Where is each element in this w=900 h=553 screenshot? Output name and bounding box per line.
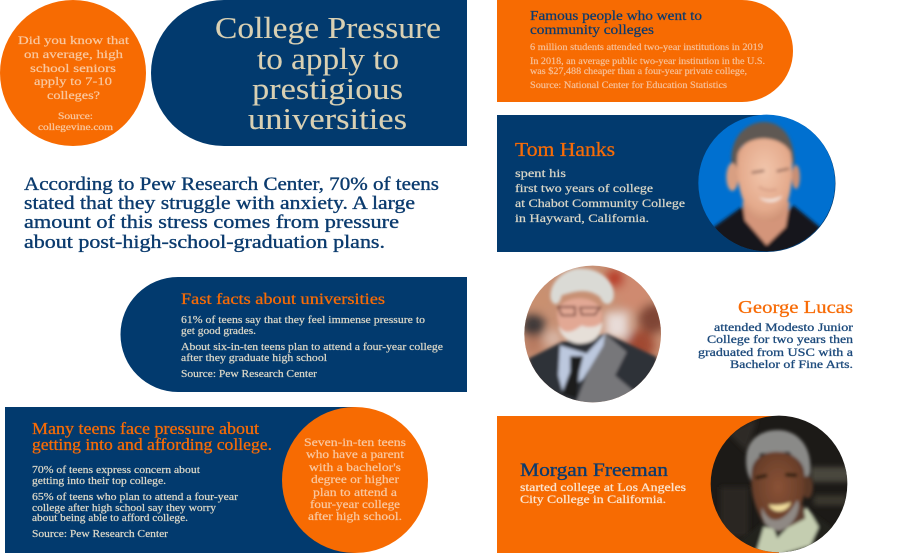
heading: famous people	[530, 8, 702, 37]
panel: Morgan Freeman	[497, 412, 854, 553]
text: fast facts body: 61% of teens say that they feel immense pressure to	[181, 315, 425, 326]
text: did you know fact: school seniors	[30, 61, 116, 75]
text: George Lucas bio	[698, 320, 854, 371]
title: College Pressure	[215, 10, 441, 45]
text: community college statistics	[530, 43, 765, 91]
text block: anxiety statistic: about post-high-school-graduation plans.	[24, 233, 385, 253]
image: Morgan Freeman portrait	[707, 412, 854, 553]
callout: seven in ten circle: with a bachelor's	[309, 460, 401, 474]
panel: Tom Hanks	[497, 112, 838, 255]
heading: many teens: Many teens face pressure about	[32, 419, 259, 438]
heading: many teens: getting into and affording college.	[32, 435, 272, 454]
text: fast facts body: after they graduate high school	[181, 353, 327, 364]
callout: seven in ten circle: four-year college	[310, 497, 400, 511]
heading: George Lucas: George Lucas	[738, 297, 853, 317]
text: many teens body	[32, 465, 239, 540]
text: Tom Hanks bio: in Hayward, California.	[515, 211, 649, 225]
text: did you know fact: collegevine.com	[38, 122, 113, 132]
panel: fast facts	[120, 277, 467, 392]
text: did you know fact	[18, 33, 130, 132]
text: many teens body: getting into their top college.	[32, 476, 166, 487]
panel: famous people	[497, 0, 793, 102]
text: Tom Hanks bio: spent his	[515, 166, 566, 180]
heading: famous people: Famous people who went to	[530, 8, 702, 23]
text: fast facts body: About six-in-ten teens plan to attend a four-year college	[181, 342, 443, 353]
text: Tom Hanks bio	[515, 166, 685, 225]
image: Tom Hanks portrait	[695, 112, 838, 255]
text: George Lucas bio: graduated from USC with a	[698, 345, 854, 359]
text: many teens body: 65% of teens who plan to attend a four-year	[32, 492, 239, 503]
title: prestigious	[252, 71, 403, 106]
heading: fast facts: Fast facts about universities	[181, 291, 385, 308]
text: many teens body: Source: Pew Research Center	[32, 529, 169, 540]
text: community college statistics: was $27,488 cheaper than a four-year private college,	[530, 66, 747, 77]
text: community college statistics: In 2018, an average public two-year institution in the U.S.	[530, 57, 765, 67]
panel: George Lucas	[520, 262, 854, 409]
text: many teens body: 70% of teens express concern about	[32, 465, 200, 476]
callout: seven in ten circle	[282, 407, 428, 553]
text: Tom Hanks bio: first two years of college	[515, 181, 653, 195]
text: did you know fact: on average, high	[24, 47, 123, 61]
callout: seven in ten circle: plan to attend a	[313, 485, 398, 499]
heading: Morgan Freeman: Morgan Freeman	[520, 461, 668, 481]
title: universities	[248, 101, 407, 136]
text block: anxiety statistic: amount of this stress comes from pressure	[24, 213, 399, 233]
text: did you know fact: apply to 7-10	[34, 74, 112, 88]
text: fast facts body	[181, 315, 443, 380]
text: community college statistics: Source: National Center for Education Statistics	[530, 80, 727, 91]
image: George Lucas portrait	[524, 266, 661, 402]
text: Tom Hanks bio: at Chabot Community College	[515, 196, 685, 210]
text: Morgan Freeman bio	[520, 480, 686, 506]
heading: Tom Hanks: Tom Hanks	[515, 140, 615, 161]
text: Morgan Freeman bio: started college at Los Angeles	[520, 480, 686, 494]
text: many teens body: about being able to afford college.	[32, 513, 188, 524]
title: to apply to	[257, 41, 399, 76]
text: many teens body: college after high school say they worry	[32, 503, 217, 514]
panel: many teens face pressure	[5, 407, 428, 553]
text: George Lucas bio: College for two years then	[707, 332, 853, 346]
text: did you know fact: Source:	[58, 111, 93, 121]
callout: seven in ten circle: after high school.	[308, 509, 402, 523]
text: George Lucas bio: Bachelor of Fine Arts.	[730, 357, 853, 371]
callout: seven in ten circle: degree or higher	[311, 472, 399, 486]
text: community college statistics: 6 million students attended two-year institutions in 2019	[530, 43, 763, 53]
text: fast facts body: get good grades.	[181, 326, 256, 337]
title	[215, 10, 441, 136]
panel: did you know circle	[0, 0, 146, 146]
heading: famous people: community colleges	[530, 22, 654, 37]
text block: anxiety statistic: stated that they struggle with anxiety. A large	[24, 194, 415, 214]
text: fast facts body: Source: Pew Research Center	[181, 369, 318, 380]
text block: anxiety statistic	[24, 175, 439, 253]
text: did you know fact: colleges?	[47, 88, 100, 102]
callout: seven in ten circle: who have a parent	[306, 447, 405, 461]
heading: many teens	[32, 419, 272, 454]
callout: seven in ten circle: Seven-in-ten teens	[304, 435, 406, 449]
text: did you know fact: Did you know that	[18, 33, 130, 47]
panel: title	[151, 0, 467, 146]
text: George Lucas bio: attended Modesto Junior	[714, 320, 853, 334]
text block: anxiety statistic: According to Pew Research Center, 70% of teens	[24, 175, 439, 195]
text: Morgan Freeman bio: City College in California.	[520, 492, 666, 506]
